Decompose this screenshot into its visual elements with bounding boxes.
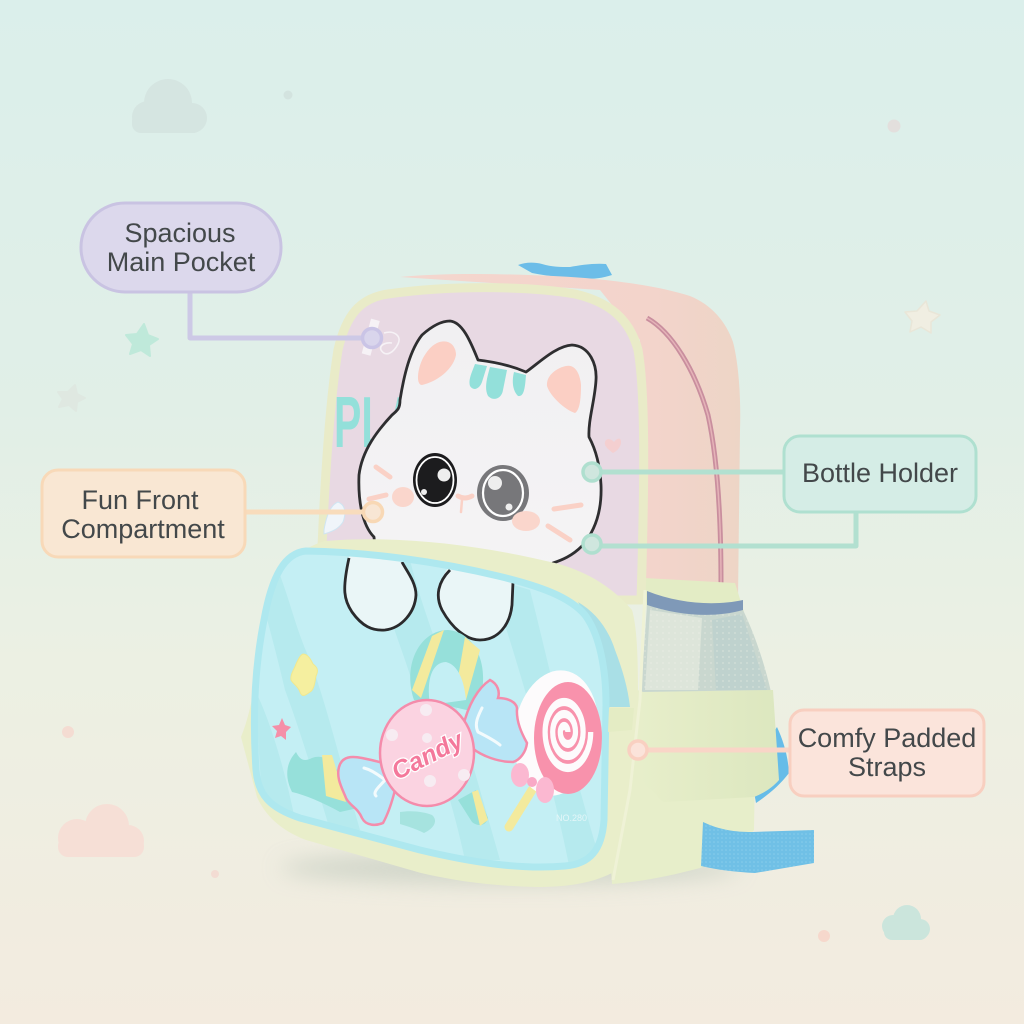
side strip of pocket [578,602,630,707]
callout: comfy padded straps: Straps [848,752,926,782]
cheeks [392,487,414,507]
callout: fun front compartment [42,470,382,557]
left eye [413,453,457,507]
side pocket flap [640,690,779,802]
front face of main pocket with cream trim [320,288,644,600]
side green upper gusset [644,578,744,612]
callout: bottle holder: Bottle Holder [802,458,958,488]
callout: spacious main pocket: Main Pocket [107,247,256,277]
diagonal stripes [255,560,600,870]
small cloud print [324,502,345,534]
cream front pocket body [241,539,638,887]
icon: right strap behind [750,727,789,803]
star prints [291,654,317,695]
callout: fun front compartment: Compartment [61,514,225,544]
side panel with zipper [400,274,740,600]
callout: spacious main pocket: Spacious [124,218,236,248]
model number: NO.280 [556,813,587,823]
backpack illustration [241,263,814,887]
lower body [600,690,755,884]
callout: bottle holder [583,436,976,553]
candy word: Candy [387,726,469,786]
nose and whiskers [369,467,581,540]
water bottle mesh holder [641,591,771,692]
brand mark [362,319,399,356]
callout: spacious main pocket [81,203,382,348]
white cat paws [345,556,416,630]
right eye [477,465,529,521]
callout: fun front compartment: Fun Front [81,485,199,515]
pocket rim [254,551,606,867]
side pouch at front edge [608,708,634,732]
side seam trim [613,590,645,880]
PLAY lettering: PLA [334,383,416,463]
ears [418,341,456,385]
blue bottom loop [701,822,814,873]
heart print [605,439,621,453]
callout: comfy padded straps [629,710,984,796]
small pink tab [267,580,278,607]
lollipop print [506,665,606,827]
decorative clouds, stars and dots [58,79,940,942]
head stripes [469,364,487,389]
ground shadow [280,852,740,884]
callout: comfy padded straps: Comfy Padded [798,723,976,753]
wrapped candy print [338,680,527,825]
blue front pocket panel [254,551,606,870]
top handle [518,263,612,279]
cat head [359,321,601,600]
candy cane print [287,630,488,833]
